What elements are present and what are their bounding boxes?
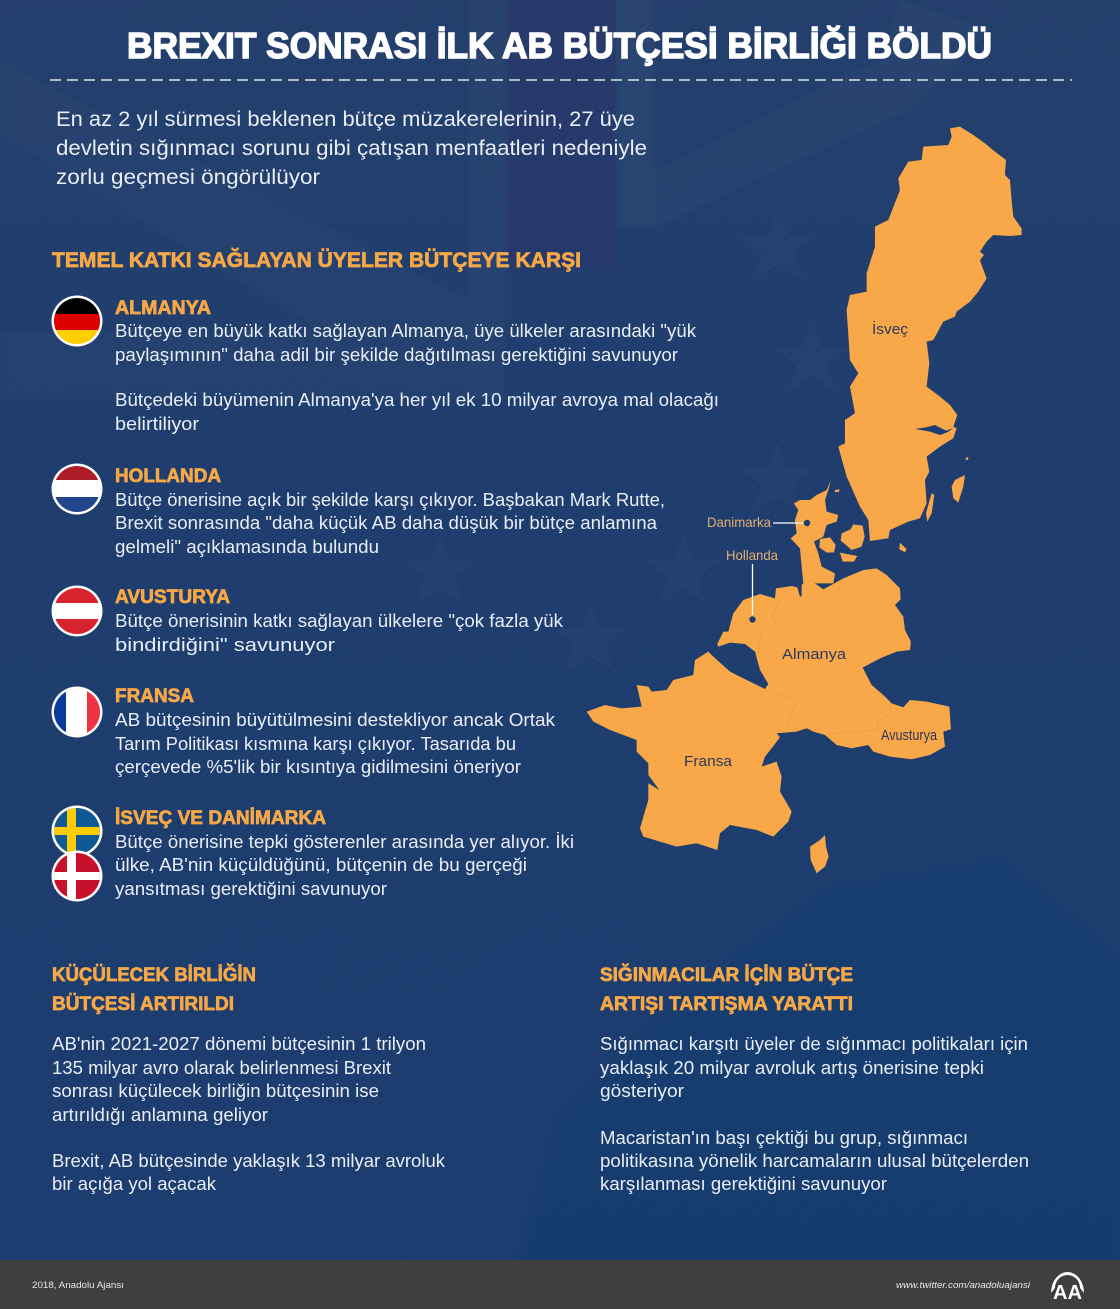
text: budget: sonrası küçülecek birliğin bütçesinin ise bbox=[52, 1081, 379, 1101]
label: Avusturya: Avusturya bbox=[881, 727, 938, 744]
text: refugees: karşılanması gerektiğini savunuyor bbox=[600, 1174, 887, 1194]
text: budget: artırıldığı anlamına geliyor bbox=[52, 1105, 268, 1125]
panel: Hollanda bbox=[50, 464, 665, 557]
text: İsveç ve Danimarka bbox=[115, 832, 574, 899]
icon: AA logo bbox=[1051, 1272, 1084, 1304]
panel: İsveç ve Danimarka bbox=[50, 806, 574, 902]
heading: budget: BÜTÇESİ ARTIRILDI bbox=[52, 994, 234, 1015]
text: Hollanda: Brexit sonrasında "daha küçük AB daha düşük bir bütçe anlamına bbox=[115, 513, 658, 533]
text: refugees: gösteriyor bbox=[600, 1081, 684, 1101]
heading: Hollanda: HOLLANDA bbox=[115, 466, 221, 487]
text: İsveç ve Danimarka: ülke, AB'nin küçüldüğünü, bütçenin de bu gerçeği bbox=[115, 855, 527, 875]
title: BREXIT SONRASI İLK AB BÜTÇESİ BİRLİĞİ BÖLDÜ bbox=[127, 25, 992, 66]
text: İsveç ve Danimarka: yansıtması gerektiğini savunuyor bbox=[115, 879, 387, 899]
text: refugees: Macaristan'ın başı çektiği bu grup, sığınmacı bbox=[600, 1128, 968, 1148]
map: Sweden bbox=[838, 127, 1022, 552]
map of Europe bbox=[587, 127, 1022, 873]
text: Hollanda bbox=[115, 490, 665, 557]
heading: Almanya: ALMANYA bbox=[115, 298, 211, 319]
text: Hollanda: Bütçe önerisine açık bir şekilde karşı çıkıyor. Başbakan Mark Rutte, bbox=[115, 490, 665, 510]
heading: İsveç ve Danimarka: İSVEÇ VE DANİMARKA bbox=[115, 808, 326, 829]
icon: Swedish flag bbox=[52, 806, 102, 854]
icon: AA logo: AA bbox=[1053, 1282, 1082, 1304]
panel: Almanya bbox=[50, 296, 719, 434]
text: budget bbox=[52, 1034, 446, 1194]
text: Avusturya bbox=[115, 611, 564, 655]
twitter url: www.twitter.com/anadoluajansi bbox=[896, 1280, 1031, 1291]
icon: Austrian flag bbox=[50, 586, 104, 636]
text: Almanya: Bütçedeki büyümenin Almanya'ya her yıl ek 10 milyar avroya mal olacağı bbox=[115, 390, 719, 410]
text: Almanya bbox=[115, 321, 719, 434]
panel: Fransa bbox=[50, 686, 556, 777]
text: refugees: Sığınmacı karşıtı üyeler de sığınmacı politikaları için bbox=[600, 1034, 1028, 1054]
text: Avusturya: Bütçe önerisinin katkı sağlayan ülkelere "çok fazla yük bbox=[115, 611, 564, 631]
label: Almanya: Almanya bbox=[782, 646, 847, 663]
label: Hollanda with marker bbox=[726, 547, 778, 623]
heading: refugees: ARTIŞI TARTIŞMA YARATTI bbox=[600, 994, 853, 1015]
panel: budget column bbox=[52, 964, 446, 1194]
label: Fransa: Fransa bbox=[684, 753, 733, 770]
text: Avusturya: bindirdiğini" savunuyor bbox=[115, 635, 335, 655]
text: Almanya: belirtiliyor bbox=[115, 414, 199, 434]
text: Hollanda: gelmeli" açıklamasında bulundu bbox=[115, 537, 379, 557]
label: Hollanda with marker: Hollanda bbox=[726, 547, 778, 563]
text: Fransa: çerçevede %5'lik bir kısıntıya gidilmesini öneriyor bbox=[115, 757, 521, 777]
heading: Fransa: FRANSA bbox=[115, 686, 194, 707]
intro text: devletin sığınmacı sorunu gibi çatışan menfaatleri nedeniyle bbox=[56, 137, 647, 160]
text: refugees: politikasına yönelik harcamaların ulusal bütçelerden bbox=[600, 1151, 1029, 1171]
icon: German flag bbox=[50, 296, 104, 346]
label: Danimarka with marker: Danimarka bbox=[707, 514, 771, 530]
label: Danimarka with marker bbox=[707, 514, 810, 530]
label: İsveç: İsveç bbox=[872, 320, 909, 338]
text: budget: bir açığa yol açacak bbox=[52, 1174, 217, 1194]
icon: Danish flag bbox=[50, 850, 104, 902]
text: İsveç ve Danimarka: Bütçe önerisine tepki gösterenler arasında yer alıyor. İki bbox=[115, 832, 574, 852]
heading: refugees bbox=[600, 964, 853, 1015]
panel: Avusturya bbox=[50, 586, 564, 655]
intro text bbox=[56, 108, 647, 189]
text: budget: Brexit, AB bütçesinde yaklaşık 13 milyar avroluk bbox=[52, 1151, 446, 1171]
icon: French flag bbox=[50, 686, 103, 738]
heading: budget: KÜÇÜLECEK BİRLİĞİN bbox=[52, 964, 256, 986]
map: Denmark bbox=[791, 480, 865, 583]
credit: 2018, Anadolu Ajansı bbox=[32, 1280, 124, 1291]
heading: Avusturya: AVUSTURYA bbox=[115, 587, 230, 608]
text: budget: 135 milyar avro olarak belirlenmesi Brexit bbox=[52, 1058, 391, 1078]
map: Germany, Netherlands, Austria and France bbox=[587, 552, 951, 873]
heading: refugees: SIĞINMACILAR İÇİN BÜTÇE bbox=[600, 964, 853, 986]
text: Fransa: AB bütçesinin büyütülmesini destekliyor ancak Ortak bbox=[115, 710, 556, 730]
text: refugees: yaklaşık 20 milyar avroluk artış önerisine tepki bbox=[600, 1058, 984, 1078]
intro text: zorlu geçmesi öngörülüyor bbox=[56, 166, 320, 189]
footer bbox=[0, 1260, 1120, 1309]
text: budget: AB'nin 2021-2027 dönemi bütçesinin 1 trilyon bbox=[52, 1034, 426, 1054]
text: Almanya: Bütçeye en büyük katkı sağlayan Almanya, üye ülkeler arasındaki "yük bbox=[115, 321, 697, 341]
section heading: TEMEL KATKI SAĞLAYAN ÜYELER BÜTÇEYE KARŞI bbox=[52, 248, 581, 272]
intro text: En az 2 yıl sürmesi beklenen bütçe müzakerelerinin, 27 üye bbox=[56, 108, 635, 131]
text: refugees bbox=[600, 1034, 1029, 1194]
icon: Dutch flag bbox=[50, 464, 104, 514]
panel: refugees column bbox=[600, 964, 1029, 1194]
heading: budget bbox=[52, 964, 256, 1015]
text: Almanya: paylaşımının" daha adil bir şekilde dağıtılması gerektiğini savunuyor bbox=[115, 345, 678, 365]
text: Fransa bbox=[115, 710, 556, 777]
dashed divider bbox=[50, 79, 1072, 81]
text: Fransa: Tarım Politikası kısmına karşı çıkıyor. Tasarıda bu bbox=[115, 734, 516, 754]
